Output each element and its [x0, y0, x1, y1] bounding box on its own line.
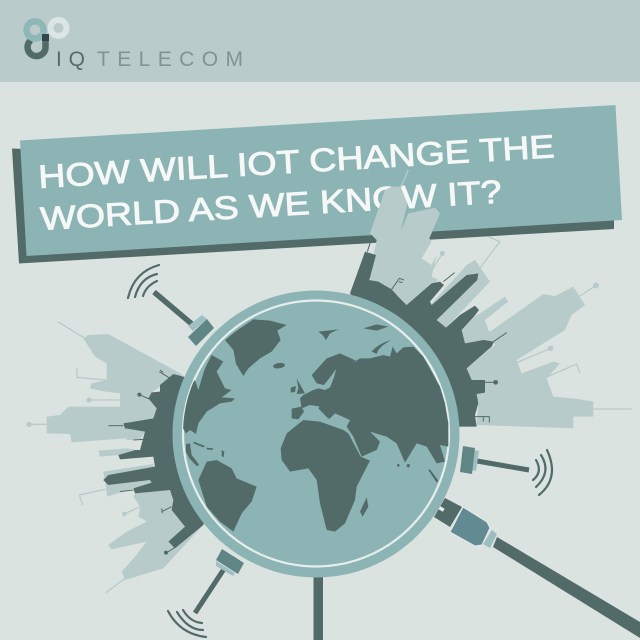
- antenna mast: [154, 292, 193, 325]
- title banner: [12, 105, 622, 264]
- title text: [37, 128, 556, 237]
- banner shadow: [12, 148, 614, 264]
- plug collar: [483, 530, 497, 548]
- bottom pole: [314, 570, 323, 640]
- Africa: [281, 420, 370, 532]
- Greenland: [225, 319, 287, 376]
- Iberia: [292, 407, 304, 419]
- antenna base: [471, 450, 479, 471]
- globe: [172, 290, 460, 578]
- banner panel: [20, 105, 622, 256]
- globe inner outline: [183, 300, 449, 566]
- Madagascar: [360, 497, 368, 517]
- cable: [493, 537, 640, 638]
- British Isles: [291, 378, 305, 394]
- logo mark: linked rings: [27, 20, 66, 56]
- North America: [180, 355, 235, 434]
- dark buildings, left: [103, 370, 227, 555]
- Eurasia: [300, 347, 448, 463]
- Central America: [186, 443, 199, 466]
- antenna base: [188, 315, 207, 331]
- logo wordmark: TELECOM: TELECOM: [97, 48, 243, 71]
- light buildings, upper right: [368, 170, 632, 428]
- Iceland: [273, 362, 285, 368]
- antenna mast: [477, 461, 529, 470]
- continents: [180, 319, 448, 532]
- signal waves: [168, 610, 206, 637]
- usb cable: [434, 498, 640, 638]
- signal waves: [128, 265, 159, 298]
- skyline: left: [26, 322, 227, 593]
- Indonesia: [428, 469, 438, 483]
- Scandinavia: [312, 353, 356, 385]
- title text: HOW WILL IOT CHANGE THE: [37, 128, 556, 195]
- plug metal tip: [434, 498, 462, 527]
- Italy and Mediterranean islands: [318, 406, 331, 418]
- light buildings, left: [26, 322, 203, 593]
- title text: WORLD AS WE KNOW IT?: [39, 174, 503, 237]
- antenna: upper left: [128, 265, 214, 346]
- antenna mast: [195, 569, 224, 613]
- Caribbean islands: [193, 442, 224, 457]
- logo wordmark: IQ: IQ: [56, 48, 85, 71]
- logo: [27, 20, 243, 71]
- plug head: [450, 507, 490, 546]
- Sri Lanka and islands: [397, 464, 400, 467]
- antenna: right: [460, 446, 552, 495]
- antenna base: [216, 561, 235, 576]
- dark buildings, upper right: [350, 238, 507, 427]
- Arctic islands: [318, 324, 388, 340]
- skyline: upper right: [350, 170, 632, 428]
- signal waves: [533, 450, 552, 495]
- header band: [0, 0, 640, 82]
- South America: [198, 460, 257, 532]
- antenna: bottom left: [168, 549, 244, 637]
- globe ring: [172, 290, 460, 578]
